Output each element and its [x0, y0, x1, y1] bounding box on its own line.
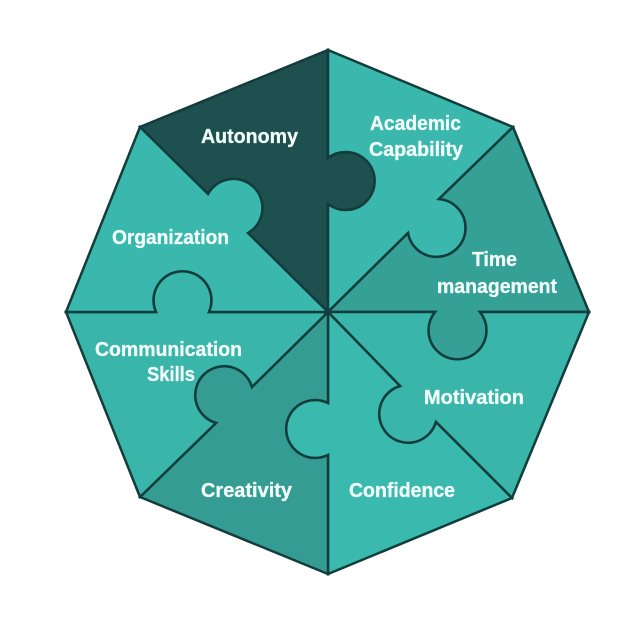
puzzle piece: Confidence [286, 312, 512, 574]
puzzle piece: Creativity [140, 312, 328, 574]
puzzle piece: Communication Skills [66, 271, 328, 497]
puzzle piece: Academic Capability: Capability [369, 139, 464, 161]
puzzle piece: Motivation [328, 312, 589, 498]
puzzle piece: Autonomy [140, 50, 375, 312]
puzzle piece: Time management [328, 127, 589, 359]
puzzle piece: Autonomy: Autonomy [201, 126, 299, 148]
puzzle piece: Communication Skills: Skills [147, 364, 195, 386]
puzzle piece: Motivation: Motivation [424, 387, 524, 409]
puzzle piece: Time management: management [437, 276, 557, 298]
puzzle piece: Confidence: Confidence [349, 480, 455, 502]
puzzle piece: Organization [66, 127, 328, 312]
puzzle piece: Time management: Time [472, 249, 517, 271]
puzzle piece: Organization: Organization [112, 227, 229, 249]
puzzle piece: Academic Capability: Academic [370, 113, 461, 135]
puzzle piece: Communication Skills: Communication [95, 339, 242, 361]
puzzle piece: Academic Capability [328, 50, 513, 312]
puzzle piece: Creativity: Creativity [201, 480, 293, 502]
